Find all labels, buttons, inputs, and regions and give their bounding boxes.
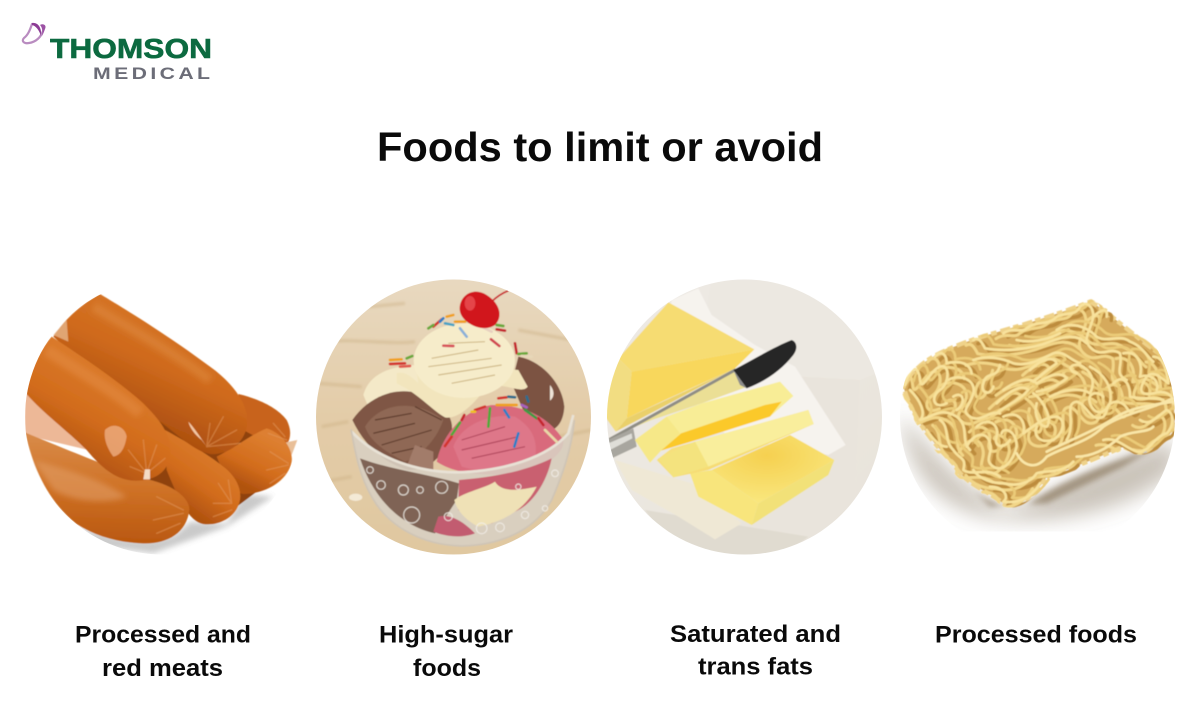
butter block: back — [605, 302, 754, 432]
butter slice: lower — [657, 410, 814, 477]
wooden table — [315, 278, 592, 555]
label: saturated and trans fats: trans fats — [698, 654, 813, 680]
label: processed and red meats — [75, 622, 251, 682]
sausage: bottom — [25, 433, 189, 543]
label: high-sugar foods — [379, 622, 513, 682]
lower slab behind knife — [632, 372, 746, 428]
parchment paper — [662, 288, 846, 455]
sausage end creases — [128, 417, 288, 533]
vanilla melt — [363, 365, 418, 404]
knife — [608, 340, 796, 458]
sausage: right lower — [217, 428, 292, 494]
panel: processed foods photo — [898, 300, 1182, 520]
butter slice: upper — [635, 382, 793, 463]
brand name: THOMSON — [50, 33, 212, 64]
sausage: back right — [238, 394, 290, 450]
label: processed foods: Processed foods — [935, 622, 1137, 648]
label: high-sugar foods: foods — [413, 655, 481, 682]
scoop: strawberry — [437, 405, 563, 475]
pale sausage strip — [25, 394, 86, 450]
noodle shadow — [900, 413, 1177, 520]
panel: high-sugar foods photo — [315, 278, 592, 555]
butter block: bottom — [690, 435, 834, 525]
label: saturated and trans fats — [670, 621, 841, 680]
panel: saturated and trans fats photo — [605, 278, 885, 558]
label: processed and red meats: Processed and — [75, 622, 251, 648]
sausage: mid left — [26, 337, 171, 481]
logo: Thomson Medical — [23, 23, 213, 83]
panel: processed and red meats photo — [25, 294, 297, 553]
noodle front edge — [1017, 398, 1173, 465]
sausage: middle — [165, 430, 240, 524]
sausage dark base — [148, 420, 256, 506]
title: Foods to limit or avoid — [377, 124, 823, 170]
label: processed and red meats: red meats — [102, 655, 223, 682]
sausage: top — [53, 294, 247, 454]
instant noodle block — [898, 300, 1182, 507]
maraschino cherry — [460, 291, 508, 328]
icon: butterfly — [23, 23, 46, 43]
label: high-sugar foods: High-sugar — [379, 622, 513, 648]
label: saturated and trans fats: Saturated and — [670, 621, 841, 648]
brand descriptor: MEDICAL — [93, 65, 213, 83]
scoop: vanilla — [397, 369, 528, 418]
scoop: chocolate back — [512, 357, 564, 432]
table background — [605, 278, 885, 558]
sausage shadow — [77, 494, 273, 553]
scoop: chocolate — [352, 391, 452, 470]
wooden board — [615, 280, 885, 537]
glass bowl — [351, 415, 574, 546]
sprinkles — [390, 315, 557, 447]
